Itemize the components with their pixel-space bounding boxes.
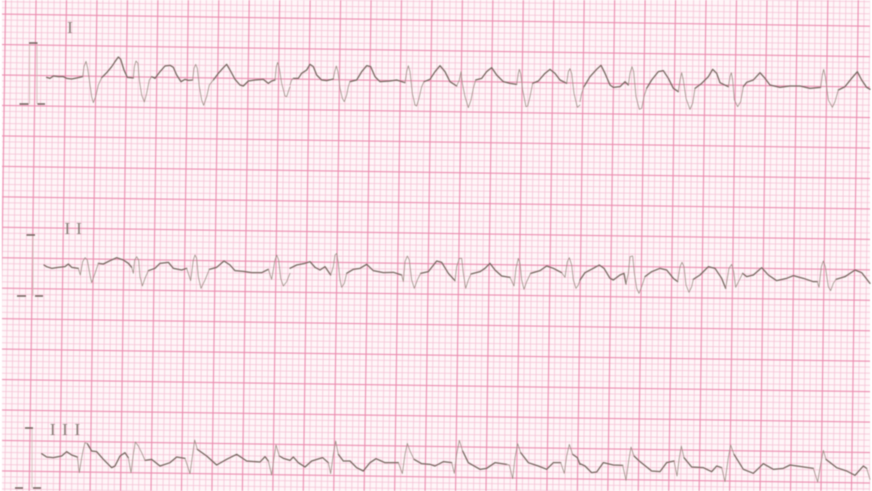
lead I trace, part 2 bbox=[290, 64, 580, 108]
lead I trace, part 1 bbox=[47, 57, 290, 105]
paper right margin bbox=[870, 0, 872, 491]
lead I label: I bbox=[67, 18, 73, 37]
lead I trace, part 3 bbox=[580, 65, 870, 109]
lead I calibration pulse bbox=[20, 43, 45, 104]
lead III calibration pulse bbox=[15, 428, 41, 488]
lead I group bbox=[20, 18, 870, 109]
lead III trace, part 2 bbox=[290, 440, 580, 479]
lead II trace, part 3 bbox=[580, 256, 870, 293]
lead II label: II bbox=[64, 219, 82, 238]
lead II group bbox=[17, 219, 870, 296]
paper left margin bbox=[0, 0, 2, 491]
lead III trace, part 3 bbox=[580, 445, 870, 482]
lead II trace, part 2 bbox=[290, 253, 580, 289]
lead III trace, part 1 bbox=[42, 440, 290, 475]
lead II calibration pulse bbox=[17, 235, 43, 296]
lead II trace, part 1 bbox=[44, 255, 290, 288]
lead III label: III bbox=[50, 420, 80, 439]
lead III group bbox=[15, 420, 870, 488]
